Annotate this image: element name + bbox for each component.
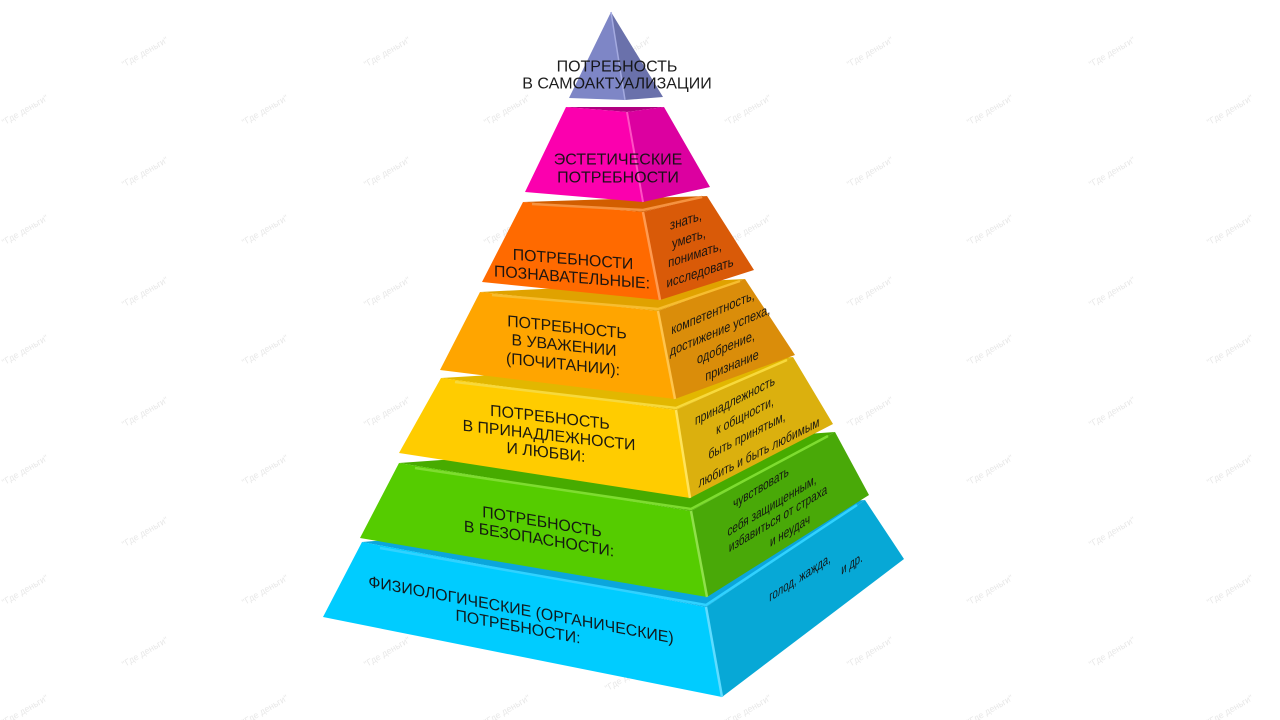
front label: (ПОЧИТАНИИ): (506, 350, 620, 380)
side label: принадлежность (695, 371, 775, 429)
watermark pattern: "Где деньги" (0, 573, 50, 607)
watermark pattern: "Где деньги" (120, 275, 170, 309)
side label: любить и быть любимым (699, 413, 819, 491)
label: В САМОАКТУАЛИЗАЦИИ (522, 76, 712, 92)
side label (769, 548, 863, 605)
watermark pattern: "Где деньги" (965, 93, 1015, 127)
side label: одобрение, (697, 327, 755, 367)
front label: ПОТРЕБНОСТИ (513, 247, 633, 273)
watermark pattern: "Где деньги" (723, 93, 773, 127)
watermark pattern: "Где деньги" (362, 395, 412, 429)
front label: ПОТРЕБНОСТИ: (456, 606, 580, 648)
watermark pattern: "Где деньги" (1087, 275, 1137, 309)
front label: В БЕЗОПАСНОСТИ: (464, 517, 614, 561)
watermark pattern: "Где деньги" (362, 275, 412, 309)
watermark pattern: "Где деньги" (120, 395, 170, 429)
watermark pattern: "Где деньги" (0, 213, 50, 247)
watermark pattern: "Где деньги" (120, 35, 170, 69)
front label: ПОТРЕБНОСТИ (557, 170, 679, 186)
front label (506, 313, 627, 380)
side label: к общности, (716, 392, 774, 438)
watermark pattern: "Где деньги" (1087, 515, 1137, 549)
tier 6: aesthetic needs (magenta) (525, 107, 710, 202)
watermark pattern: "Где деньги" (0, 333, 50, 367)
watermark pattern: "Где деньги" (1087, 395, 1137, 429)
watermark pattern: "Где деньги" (1205, 453, 1255, 487)
side label: достижение успеха, (670, 301, 770, 359)
watermark pattern: "Где деньги" (1205, 93, 1255, 127)
front label: ФИЗИОЛОГИЧЕСКИЕ (ОРГАНИЧЕСКИЕ) (368, 573, 674, 647)
watermark pattern: "Где деньги" (1205, 213, 1255, 247)
tier 7: self-actualization (purple apex) (522, 12, 712, 100)
watermark pattern: "Где деньги" (120, 155, 170, 189)
front label: В ПРИНАДЛЕЖНОСТИ (463, 418, 635, 454)
watermark pattern: "Где деньги" (482, 213, 532, 247)
watermark pattern: "Где деньги" (1205, 573, 1255, 607)
watermark pattern: "Где деньги" (362, 635, 412, 669)
watermark pattern: "Где деньги" (1087, 35, 1137, 69)
side label: быть принятым, (708, 407, 786, 463)
side label: знать, (670, 207, 702, 233)
watermark pattern: "Где деньги" (1087, 635, 1137, 669)
side label (666, 207, 734, 291)
watermark pattern: "Где деньги" (1205, 333, 1255, 367)
side label: исследовать (666, 253, 734, 291)
watermark pattern: "Где деньги" (120, 515, 170, 549)
front label: И ЛЮБВИ: (507, 440, 585, 466)
watermark pattern: "Где деньги" (723, 213, 773, 247)
watermark pattern: "Где деньги" (845, 35, 895, 69)
side label: избавиться от страха (729, 480, 828, 556)
watermark pattern: "Где деньги" (603, 35, 653, 69)
front label: ПОЗНАВАТЕЛЬНЫЕ: (494, 263, 650, 293)
tier 3: belonging and love (yellow) (399, 357, 833, 498)
side label: голод, жажда, (769, 549, 831, 605)
front label (494, 247, 650, 293)
watermark pattern: "Где деньги" (482, 93, 532, 127)
watermark pattern: "Где деньги" (240, 213, 290, 247)
front label: ПОТРЕБНОСТЬ (482, 503, 602, 541)
tier 5: cognitive needs (orange) (482, 196, 754, 300)
side label (670, 286, 770, 384)
watermark pattern: "Где деньги" (965, 573, 1015, 607)
side label: понимать, (668, 237, 722, 271)
tier 2: safety needs (green) (360, 432, 869, 597)
watermark pattern: "Где деньги" (240, 93, 290, 127)
label: ПОТРЕБНОСТЬ (557, 58, 677, 76)
front label: ЭСТЕТИЧЕСКИЕ (554, 152, 682, 168)
watermark pattern: "Где деньги" (845, 635, 895, 669)
watermark pattern: "Где деньги" (362, 35, 412, 69)
side label: компетентность, (671, 286, 755, 338)
watermark pattern: "Где деньги" (240, 573, 290, 607)
watermark pattern: "Где деньги" (965, 213, 1015, 247)
front label: ПОТРЕБНОСТЬ (490, 403, 610, 433)
watermark pattern: "Где деньги" (0, 453, 50, 487)
side label: и др. (841, 548, 863, 578)
watermark pattern: "Где деньги" (0, 93, 50, 127)
watermark pattern: "Где деньги" (845, 275, 895, 309)
watermark pattern: "Где деньги" (603, 659, 653, 693)
watermark pattern: "Где деньги" (965, 333, 1015, 367)
watermark pattern: "Где деньги" (845, 395, 895, 429)
watermark pattern: "Где деньги" (965, 453, 1015, 487)
side label: уметь, (672, 224, 706, 252)
watermark pattern: "Где деньги" (1087, 155, 1137, 189)
front label (554, 152, 682, 186)
front label: ПОТРЕБНОСТЬ (507, 313, 627, 343)
label (522, 58, 712, 92)
side label: и неудач (770, 510, 810, 550)
tier 1: physiological needs (blue) (323, 500, 904, 697)
side label: чувствовать (733, 462, 789, 512)
watermark pattern: "Где деньги" (120, 635, 170, 669)
watermark pattern: "Где деньги" (845, 155, 895, 189)
side label: себя защищенным, (727, 470, 817, 540)
front label (463, 403, 635, 466)
tier 4: esteem needs (amber) (440, 279, 795, 399)
watermark pattern: "Где деньги" (362, 155, 412, 189)
side label: признание (705, 346, 759, 384)
side label (695, 371, 819, 491)
watermark pattern: "Где деньги" (240, 453, 290, 487)
front label: В УВАЖЕНИИ (512, 332, 616, 360)
watermark pattern: "Где деньги" (240, 333, 290, 367)
